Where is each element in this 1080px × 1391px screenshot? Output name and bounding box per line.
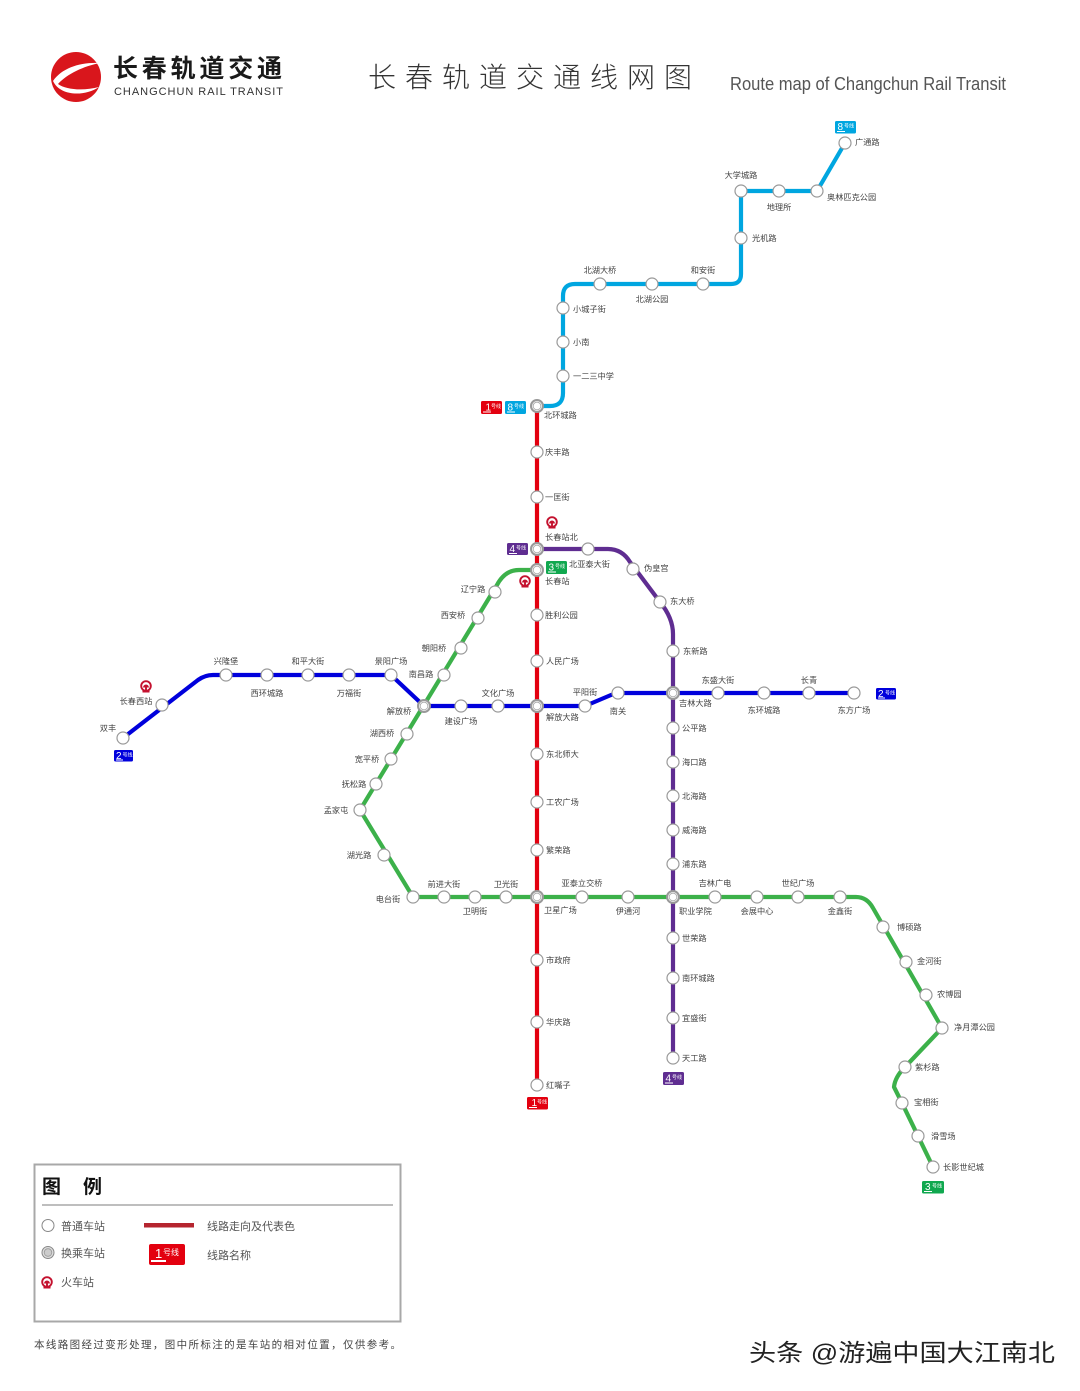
- icon: railway station Changchun West: [141, 681, 151, 692]
- line 4 stations: 东大桥: [670, 596, 695, 606]
- line 3 stations: 前进大街: [428, 879, 460, 889]
- line 4 stations: 浦东路: [682, 859, 707, 869]
- line 3 stations: 金河街: [917, 956, 942, 966]
- line 3 stations: 金鑫街: [828, 906, 852, 916]
- line 3 stations: 宽平桥: [355, 754, 379, 764]
- line 4 track: [537, 549, 673, 1058]
- line 4 stations: 北海路: [682, 791, 707, 801]
- line 3 stations: 紫杉路: [915, 1062, 940, 1072]
- line 2 stations: 西环城路: [251, 688, 283, 698]
- badge: line 2 west: 2: [116, 751, 122, 762]
- legend: line name: 线路名称: [207, 1248, 251, 1262]
- badge: line 2 west: 号线: [122, 752, 133, 758]
- line 3 stations: 卫明街: [463, 906, 487, 916]
- line 8 stations: 和安街: [691, 265, 715, 275]
- badge: line 2 east: [876, 688, 896, 700]
- legend: line colour: [144, 1219, 295, 1233]
- line 4 stations: 天工路: [682, 1053, 707, 1063]
- line 3 stations: 抚松路: [342, 779, 366, 789]
- badge: line 3 north: 3: [548, 562, 554, 574]
- legend: railway station: 火车站: [61, 1275, 94, 1289]
- badge: line 4 south: 号线: [672, 1074, 682, 1081]
- line 3 stations: 西安桥: [441, 610, 465, 620]
- badge: line 1 north: [481, 401, 502, 414]
- title: 长春轨道交通线网图: [368, 62, 692, 93]
- logo Chinese name: 长春轨道交通: [113, 55, 282, 83]
- line 4 stations: 海口路: [682, 757, 707, 767]
- line 2 stations: 东环城路: [748, 705, 780, 715]
- line 1 stations: 胜利公园: [545, 610, 578, 620]
- panel: legend: [34, 1164, 400, 1322]
- line 2 stations: 南关: [610, 706, 626, 716]
- line 1 stations: 市政府: [546, 955, 571, 965]
- badge: line 3 north: [546, 561, 567, 574]
- line 3 stations: 长影世纪城: [943, 1162, 984, 1172]
- line 3 stations: 朝阳桥: [422, 643, 446, 653]
- legend: normal station: 普通车站: [61, 1219, 105, 1233]
- line 2 stations: 长青: [801, 675, 817, 685]
- line 2 stations: 长春西站: [120, 696, 152, 706]
- line 4 stations: 威海路: [682, 825, 707, 835]
- line 2 stations: 兴隆堡: [214, 656, 238, 666]
- line 1 stations: 工农广场: [546, 797, 579, 807]
- badge: line 8 top: 号线: [844, 122, 854, 130]
- line 8 stations: 北湖公园: [636, 295, 668, 304]
- legend: line name: 号线: [163, 1247, 179, 1257]
- line 3 track: [360, 570, 942, 1167]
- line 3 stations: 孟家屯: [324, 805, 348, 815]
- legend: line name: 1: [155, 1246, 162, 1261]
- legend: interchange station: 换乘车站: [61, 1246, 105, 1260]
- line 3 stations: 伊通河: [616, 906, 640, 916]
- line 3 stations: 辽宁路: [461, 584, 485, 594]
- icon: railway station Changchun: [520, 576, 530, 586]
- badge: line 3 north: 号线: [555, 563, 565, 570]
- logo English name: CHANGCHUN RAIL TRANSIT: [114, 86, 283, 98]
- line 8 stations: 北湖大桥: [584, 265, 616, 275]
- badge: line 1 south: [527, 1097, 548, 1110]
- interchange stations: 卫星广场: [544, 905, 577, 915]
- interchange stations: 吉林大路: [679, 698, 712, 708]
- watermark: 头条 @游遍中国大江南北: [749, 1340, 1055, 1367]
- badge: line 4 south: [663, 1072, 684, 1085]
- line 1 stations: 人民广场: [546, 656, 579, 666]
- legend heading: [42, 1176, 102, 1198]
- line 4 stations: 宜盛街: [682, 1013, 707, 1023]
- badge: line 8 top: [835, 121, 856, 134]
- line 8 stations: [557, 137, 880, 382]
- footnote: 本线路图经过变形处理，图中所标注的是车站的相对位置，仅供参考。: [34, 1338, 401, 1351]
- logo emblem: [51, 52, 101, 102]
- legend: line colour: 线路走向及代表色: [207, 1219, 295, 1233]
- line 1 stations: 一匡街: [545, 492, 570, 502]
- line 2 stations: 东盛大街: [702, 675, 734, 685]
- legend heading: 图: [42, 1176, 61, 1198]
- line 8 stations: 小南: [573, 337, 589, 347]
- line 2 stations: 万福街: [337, 688, 361, 698]
- line 3 stations: 滑雪场: [931, 1131, 956, 1141]
- interchange stations: 北环城路: [544, 410, 577, 420]
- line 3 stations: 湖西桥: [370, 728, 394, 738]
- line 8 track: [537, 143, 845, 406]
- badge: line 4 north: [507, 543, 528, 555]
- badge: line 4 south: 4: [666, 1074, 672, 1084]
- line 3 stations: 吉林广电: [699, 878, 731, 888]
- line 1 stations: 东北师大: [546, 749, 579, 759]
- line 3 stations: 会展中心: [741, 906, 773, 916]
- badge: line 1 north: 1: [486, 402, 492, 414]
- line 1 stations: 华庆路: [546, 1017, 571, 1027]
- line 8 stations: 大学城路: [725, 170, 757, 180]
- line 2 stations: 景阳广场: [375, 656, 407, 666]
- line 1 track: [535, 406, 539, 1085]
- line 2 stations: 建设广场: [445, 716, 477, 726]
- line 8 stations: 一二三中学: [573, 371, 614, 381]
- badge: line 1 south: 号线: [537, 1098, 547, 1106]
- line 4 stations: 东新路: [683, 646, 708, 656]
- line 4 stations: 世荣路: [682, 933, 707, 943]
- badge: line 2 east: 2: [878, 689, 884, 700]
- legend heading: 例: [83, 1176, 102, 1198]
- badge: line 2 east: 号线: [885, 690, 895, 696]
- line 4 stations: 伪皇宫: [644, 563, 669, 573]
- line 4 stations: [569, 543, 715, 1064]
- line 3 stations: 卫光街: [494, 879, 518, 889]
- icon: railway station Changchun North: [547, 517, 557, 528]
- interchange stations: 解放桥: [387, 706, 411, 716]
- badge: line 3 south: [922, 1181, 944, 1194]
- line 8 stations: 光机路: [752, 233, 777, 243]
- English subtitle: Route map of Changchun Rail Transit: [730, 74, 1006, 94]
- line 3 stations: 电台街: [376, 894, 400, 904]
- badge: line 4 north: 号线: [516, 544, 526, 552]
- line 4 stations: 公平路: [682, 723, 707, 733]
- line 2 stations: 和平大街: [292, 656, 324, 666]
- line 1 stations: 红嘴子: [546, 1080, 571, 1090]
- badge: line 2 west: [114, 750, 133, 762]
- line 3 stations: 南昌路: [409, 669, 433, 679]
- legend: line name: [149, 1244, 251, 1265]
- line 3 stations: 世纪广场: [782, 878, 814, 888]
- line 3 stations: 博硕路: [897, 922, 922, 932]
- interchange stations: 解放大路: [546, 712, 579, 722]
- line 3 stations: 亚泰立交桥: [562, 878, 602, 888]
- badge: line 8 top: 8: [838, 122, 844, 133]
- legend: normal station: [42, 1219, 105, 1233]
- badge: line 3 south: 3: [925, 1182, 931, 1193]
- badge: line 8 south: 8: [508, 402, 514, 414]
- line 3 stations: 宝相街: [914, 1097, 939, 1107]
- interchange stations: 长春站北: [545, 532, 578, 542]
- line 1 stations: 繁荣路: [546, 845, 571, 855]
- legend: railway station: [42, 1275, 94, 1289]
- logo: Changchun Rail Transit: [51, 52, 283, 102]
- line 4 stations: 北亚泰大街: [569, 559, 610, 569]
- badge: line 8 south: [505, 401, 526, 414]
- badge: line 4 north: 4: [510, 544, 516, 555]
- interchange stations: [387, 400, 712, 916]
- line 2 stations: 东方广场: [838, 705, 870, 715]
- badge: line 1 south: 1: [532, 1098, 538, 1109]
- line 8 stations: 奥林匹克公园: [827, 192, 876, 202]
- badge: line 8 south: 号线: [514, 403, 524, 410]
- line 8 stations: 地理所: [767, 202, 791, 212]
- line 2 stations: [100, 656, 870, 744]
- line 3 stations: 净月潭公园: [954, 1022, 995, 1032]
- line 2 track: [123, 675, 854, 738]
- interchange stations: 长春站: [545, 576, 570, 586]
- line 2 stations: 双丰: [100, 723, 116, 733]
- line 1 stations: 庆丰路: [545, 447, 570, 457]
- line 4 stations: 南环城路: [682, 973, 715, 983]
- line 3 stations: 湖光路: [347, 850, 371, 860]
- badge: line 3 south: 号线: [932, 1182, 942, 1190]
- line 1 stations: [531, 446, 579, 1091]
- badge: line 1 north: 号线: [491, 403, 501, 410]
- interchange stations: 职业学院: [679, 906, 712, 916]
- line 2 stations: 平阳街: [573, 687, 597, 697]
- line 3 stations: [324, 584, 995, 1173]
- line 8 stations: 小城子街: [573, 304, 606, 314]
- line 2 stations: 文化广场: [482, 688, 514, 698]
- line 3 stations: 农博园: [937, 989, 962, 999]
- legend: interchange station: [42, 1246, 105, 1260]
- line 8 stations: 广通路: [855, 137, 880, 147]
